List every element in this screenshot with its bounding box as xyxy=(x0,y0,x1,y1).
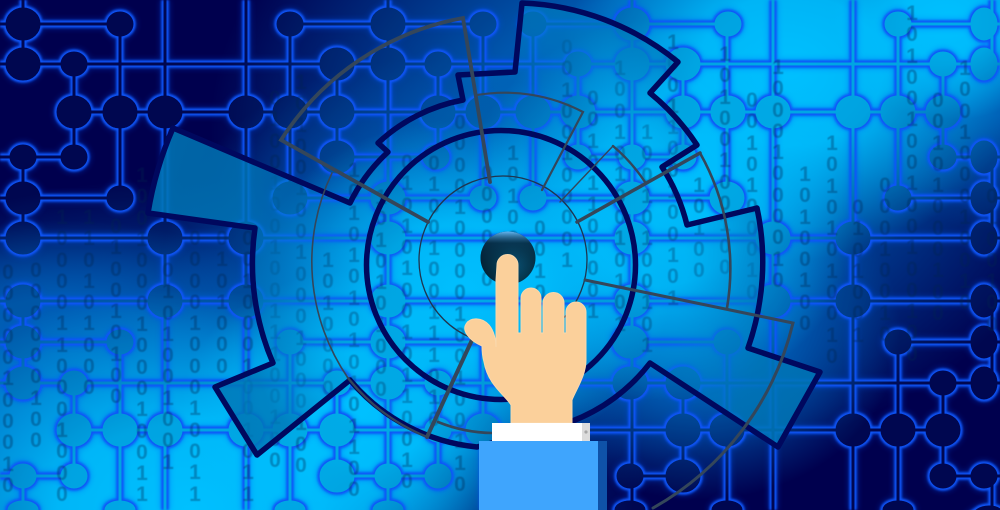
binary digit columns: 00010010 xyxy=(879,174,891,346)
binary digit columns: 0010001001011 xyxy=(242,227,254,506)
shirt cuff xyxy=(492,423,590,441)
binary digit columns: 010010010011100100 xyxy=(269,87,281,472)
binary digit columns: 000010 xyxy=(481,162,493,291)
central gear, rings, button and hand xyxy=(146,0,823,510)
binary digit columns: 1010010010001000100 xyxy=(295,71,307,477)
jacket sleeve xyxy=(479,441,607,510)
push button xyxy=(480,232,536,284)
binary digit columns: 101001 xyxy=(507,142,519,271)
binary digit columns: 00000100010 xyxy=(2,261,14,497)
grey radar arcs and spokes xyxy=(281,18,793,508)
binary digit columns: 1010000 xyxy=(322,249,334,400)
binary digit columns: 10010100101 xyxy=(641,121,653,357)
gear outline with wedges xyxy=(148,3,820,455)
binary digit columns: 00101100001 xyxy=(587,87,599,323)
binary digit columns: 0100100111010 xyxy=(428,152,440,431)
binary digit columns: 10001000010 xyxy=(772,56,784,292)
binary digit columns: 000010000100100110 xyxy=(454,111,466,496)
binary digit columns: 10101010010 xyxy=(826,132,838,368)
binary digit columns: 10100 xyxy=(693,174,705,282)
binary digit columns: 0101001001 xyxy=(162,259,174,474)
binary digit columns: 0100100 xyxy=(986,185,998,336)
pointing hand xyxy=(465,255,586,423)
binary digit columns: 1001000100010011 xyxy=(136,164,148,506)
thin centre ring xyxy=(419,176,587,344)
binary digit columns: 0101000 xyxy=(216,227,228,378)
binary digit columns: 00101000100 xyxy=(932,89,944,325)
binary digit columns: 10100100 xyxy=(799,163,811,335)
binary digit columns: 10100100100100100 xyxy=(906,2,918,366)
binary digit columns: 1001010010101 xyxy=(614,57,626,336)
binary digit columns: 010010100 xyxy=(110,215,122,408)
binary digit columns: 1010101000 xyxy=(375,186,387,401)
binary digit columns: 1001100100101 xyxy=(667,31,679,310)
binary digit columns: 0101001 xyxy=(852,196,864,347)
binary digit columns: 000000100 xyxy=(30,259,42,452)
binary digit columns: 1010101010101100 xyxy=(348,159,360,501)
binary digit columns: 10100100100 xyxy=(719,43,731,279)
binary digit columns: 0101010010110010 xyxy=(401,151,413,493)
binary digit columns: 110101000 xyxy=(83,206,95,399)
binary digit columns: 0000100010011 xyxy=(189,227,201,506)
binary digit columns: 100100010010 xyxy=(959,57,971,314)
binary digit columns: 0010100010 xyxy=(746,89,758,304)
binary digit columns: 00100100001 xyxy=(561,36,573,272)
binary digit columns: 10000110001000 xyxy=(56,206,68,506)
inner thick ring xyxy=(366,130,636,400)
binary digit columns: 0010 xyxy=(534,217,546,304)
